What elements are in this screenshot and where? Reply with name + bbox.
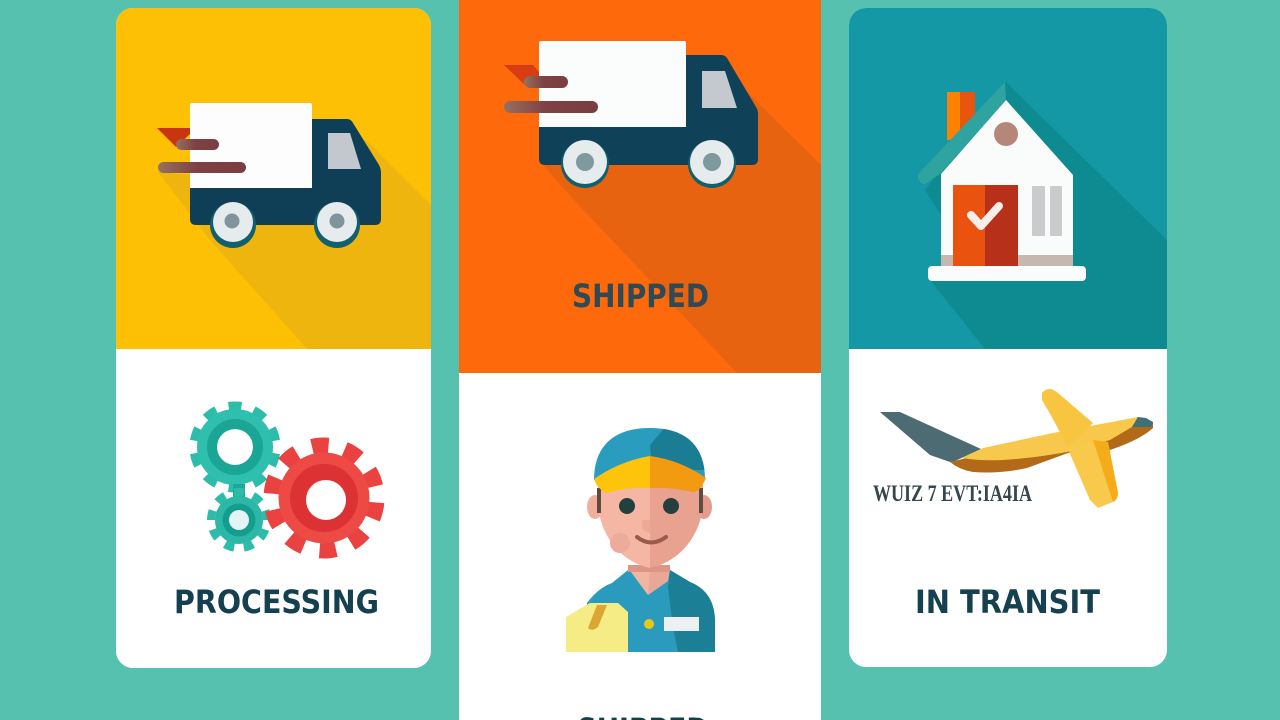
- panel: in transit card: [849, 8, 1167, 667]
- icon: courier: [566, 425, 715, 652]
- truck long shadow: [539, 85, 821, 373]
- icon: airplane: [880, 389, 1153, 508]
- card background: [116, 8, 431, 668]
- panel: shipped card: [459, 0, 821, 720]
- panel: processing card: [116, 8, 431, 668]
- garbled plane caption: WUIZ 7 EVT:IA4IA: [873, 481, 1032, 506]
- yellow header panel: [116, 8, 431, 349]
- icon: delivery truck: [157, 103, 381, 248]
- label: in transit: IN TRANSIT: [915, 583, 1100, 621]
- label: processing: PROCESSING: [174, 583, 379, 621]
- icon: house: [918, 82, 1086, 281]
- orange header panel: [459, 0, 821, 373]
- icon: delivery truck: [504, 41, 758, 188]
- heading: shipped: SHIPPED: [572, 277, 709, 315]
- card background: [849, 8, 1167, 667]
- teal header panel: [849, 8, 1167, 349]
- icon: gears: [194, 406, 380, 554]
- card background: [459, 0, 821, 720]
